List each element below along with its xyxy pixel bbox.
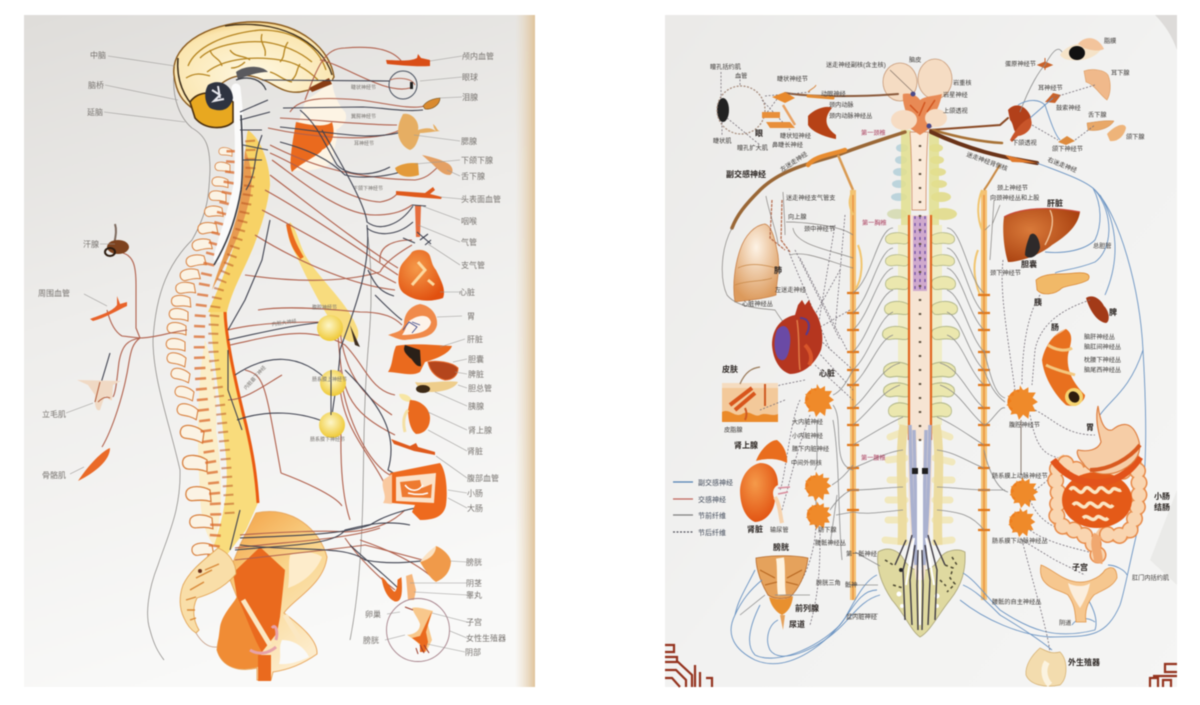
label: 颌下神经节: 颌下神经节 (1052, 145, 1083, 153)
organ: adrenal gland and kidney (399, 394, 430, 434)
label: 输尿管: 输尿管 (770, 526, 789, 534)
organ: lacrimal gland (423, 98, 440, 109)
label: 肛门内括约肌: 肛门内括约肌 (1132, 574, 1169, 582)
label: 迷走神经支气管支: 迷走神经支气管支 (786, 194, 836, 202)
organ: parotid gland right (1084, 70, 1110, 100)
organ: intestines (1053, 457, 1140, 563)
paper shading right (1150, 490, 1177, 585)
organ: heart frontal (772, 300, 822, 374)
label: 骨骼肌: 骨骼肌 (42, 470, 66, 480)
nerve fibers, parasympathetic (95, 80, 445, 590)
paper edge tint (515, 15, 535, 687)
label: 脾: 脾 (1109, 307, 1117, 317)
spinal cord (214, 88, 242, 265)
organ: sublingual and submandibular glands (1087, 121, 1126, 141)
label: 颈内动脉神经丛: 颈内动脉神经丛 (829, 112, 872, 120)
label: 阴道: 阴道 (1059, 619, 1071, 627)
label: 中脑: 中脑 (90, 50, 106, 60)
sympathetic chain right (974, 165, 1000, 600)
organ: spleen (1086, 296, 1109, 323)
label: 脾脏: 脾脏 (468, 369, 484, 379)
label: 眼球: 眼球 (462, 72, 478, 82)
label: 腹腔神经节: 腹腔神经节 (312, 304, 337, 311)
label: 脑尾西神经丛: 脑尾西神经丛 (1084, 366, 1121, 374)
label: 盆内脏神经: 盆内脏神经 (846, 613, 877, 621)
sacrum and coccyx (180, 548, 236, 647)
label: 睫状神经节: 睫状神经节 (351, 84, 376, 91)
label: 脑皮: 脑皮 (909, 56, 921, 64)
right head ganglia (1008, 49, 1095, 145)
label: 颈中神经节: 颈中神经节 (804, 225, 835, 233)
organ: skeletal muscle (78, 448, 110, 481)
organ: heart (398, 250, 444, 301)
label: 女性生殖器: 女性生殖器 (466, 633, 506, 643)
organ: intracranial blood vessel (386, 54, 430, 66)
label: 下颌透视: 下颌透视 (1012, 139, 1037, 147)
organ: pharynx, trachea and bronchi (403, 205, 431, 245)
organ: eyeball (389, 71, 417, 99)
label: 颈下神经节: 颈下神经节 (990, 269, 1021, 277)
panel: left poster, lateral autonomic nervous system (24, 15, 535, 687)
label: 颌下腺: 颌下腺 (1126, 133, 1145, 141)
label: 肠下腺: 肠下腺 (818, 526, 837, 534)
label: 大肠: 大肠 (467, 503, 483, 513)
yellow ganglia circles (317, 315, 360, 438)
label: 肾上腺: 肾上腺 (468, 425, 492, 435)
label: 小内脏神经: 小内脏神经 (792, 432, 823, 440)
right eye and head glands (1060, 38, 1104, 60)
sympathetic chain to ganglia (288, 222, 358, 342)
label: 左迷走神经 (lower): 左迷走神经 (775, 286, 806, 294)
vertebrae right poster (883, 130, 959, 545)
label: 子宫: 子宫 (1072, 562, 1088, 572)
label: 总胆管: 总胆管 (1093, 242, 1112, 250)
organ: scalp blood vessel (396, 187, 442, 199)
label: 颅内血管: 颅内血管 (462, 51, 494, 61)
label: 腹腔神经节: 腹腔神经节 (1009, 421, 1040, 429)
ganglia stars left (760, 370, 853, 625)
organ: bladder with prostate and urethra (756, 556, 808, 630)
organ: sweat gland (105, 224, 129, 256)
vertebral column yellow ganglion band (198, 130, 270, 556)
label: 尿道: 尿道 (789, 619, 805, 629)
label: 肾脏: 肾脏 (747, 524, 763, 534)
label: 睫状神经节: 睫状神经节 (777, 75, 808, 83)
organ: small and large intestine (383, 463, 447, 520)
decoration: bottom-left corner pattern (665, 645, 712, 687)
label: 支气管: 支气管 (461, 260, 485, 270)
pelvis (217, 511, 327, 681)
label: 腰骶的自主神经丛: 腰骶的自主神经丛 (992, 598, 1042, 606)
label: 心脏神经丛: 心脏神经丛 (742, 300, 773, 308)
label: 腰下内脏神经: 腰下内脏神经 (792, 445, 829, 453)
label: 岩重核: 岩重核 (953, 79, 972, 87)
paper shading top right (1155, 15, 1177, 50)
label: 周围血管: 周围血管 (38, 288, 70, 298)
label: 汗腺: 汗腺 (83, 239, 99, 249)
label: 舌下腺: 舌下腺 (461, 171, 485, 181)
label: 心脏: 心脏 (459, 287, 475, 297)
label: 肝脏: 肝脏 (1047, 198, 1063, 208)
organ: abdominal blood vessel (391, 439, 435, 455)
label: 迷走神经副核(含主核): 迷走神经副核(含主核) (826, 61, 886, 69)
label: 膀胱: 膀胱 (773, 542, 789, 552)
organ: pancreas (1036, 273, 1089, 294)
label: 舌下腺: 舌下腺 (1088, 111, 1107, 119)
brain (174, 22, 334, 128)
organ: penis and testis (382, 574, 416, 601)
label: 大内脏神经: 大内脏神经 (792, 418, 823, 426)
label: 泪腺: 泪腺 (462, 92, 478, 102)
organ: skin section (722, 367, 778, 422)
label: 立毛肌: 立毛肌 (42, 409, 66, 419)
label: 下颌下腺: 下颌下腺 (461, 155, 493, 165)
label: 颈内动脉: 颈内动脉 (829, 101, 855, 109)
label: 肠系膜下动脉神经丛: 肠系膜下动脉神经丛 (992, 537, 1048, 545)
spinal cord frontal (895, 132, 945, 630)
face (290, 78, 346, 172)
label: 结肠: 结肠 (1154, 502, 1170, 512)
organ: adrenal gland (756, 440, 787, 463)
label: 肠系膜上神经节: 肠系膜上神经节 (312, 376, 347, 383)
leader lines (66, 56, 467, 652)
label: 膀胱三角: 膀胱三角 (816, 579, 841, 587)
label: 肾脏: 肾脏 (467, 446, 483, 456)
label: 脑肝神经丛: 脑肝神经丛 (1084, 333, 1115, 341)
label: 下颌下神经节: 下颌下神经节 (353, 185, 383, 192)
nerve from vagus to heart (722, 215, 853, 400)
label: 皮肤: 皮肤 (722, 364, 738, 374)
label: 颈上神经节: 颈上神经节 (997, 184, 1028, 192)
label: 胆总管: 胆总管 (468, 383, 492, 393)
label: 腮腺: 腮腺 (461, 136, 477, 146)
label: 胆囊: 胆囊 (468, 354, 484, 364)
organ: liver, gallbladder, spleen and bile duct (388, 344, 458, 393)
label: 瞳孔括约肌: 瞳孔括约肌 (710, 63, 741, 71)
label: 睫状短神经: 睫状短神经 (780, 132, 811, 140)
label: 鼻睫长神经: 鼻睫长神经 (772, 141, 803, 149)
label: 枕腰下神经丛: 枕腰下神经丛 (1084, 356, 1121, 364)
sympathetic chain left (838, 155, 862, 600)
label: 脂膜: 脂膜 (1104, 37, 1116, 45)
label: 内脏大神经: 内脏大神经 (271, 318, 297, 328)
vagus branches right (960, 163, 1146, 650)
nerve fibers, sympathetic (102, 47, 438, 590)
legend: postganglionic: 节后纤维 (698, 528, 726, 537)
label: 胆囊: 胆囊 (1021, 259, 1037, 269)
label: 肠系膜上动脉神经节: 肠系膜上动脉神经节 (992, 472, 1048, 480)
label: 血管: 血管 (735, 72, 747, 80)
label: 右迷走神经: 右迷走神经 (1046, 155, 1078, 174)
organ: large intestine segment (1042, 329, 1087, 410)
vertebrae spinous processes (166, 140, 251, 560)
organ: submandibular and sublingual glands (395, 155, 453, 177)
label: 耳神经节: 耳神经节 (1038, 84, 1063, 92)
label: 肾上腺: 肾上腺 (734, 440, 758, 450)
label: 动眼神经: 动眼神经 (821, 90, 846, 98)
brain stem and cerebellum (883, 59, 952, 135)
ganglia stars right (984, 350, 1100, 655)
label: 岩星神经: 岩星神经 (943, 91, 968, 99)
sacrum (878, 549, 965, 637)
label: 心脏: 心脏 (819, 368, 835, 378)
label: 鼓索神经: 鼓索神经 (1056, 104, 1081, 112)
label: 迷走神经背侧核: 迷走神经背侧核 (965, 150, 1009, 173)
label: 外生殖器: 外生殖器 (1068, 657, 1100, 667)
label: 腹部血管: 腹部血管 (467, 473, 499, 483)
label: 第一腰椎: 第一腰椎 (861, 454, 886, 462)
panel: right poster, frontal autonomic nervous system (665, 15, 1177, 687)
label: 内脏最下神经: 内脏最下神经 (242, 364, 268, 391)
label: 左迷走神经: 左迷走神经 (779, 150, 809, 174)
label: 第一骶神经: 第一骶神经 (846, 550, 877, 558)
body outline (148, 75, 371, 660)
aorta orange line (225, 312, 258, 503)
label: 子宫: 子宫 (466, 617, 482, 627)
sacral pelvic splanchnic nerves left (731, 552, 880, 664)
legend (673, 478, 733, 537)
organ: external genitalia (1026, 648, 1066, 686)
organ: peripheral blood vessel (90, 296, 127, 321)
label: 阴部: 阴部 (465, 647, 481, 657)
label: 眼: 眼 (755, 129, 763, 138)
label: 蛋原神经节: 蛋原神经节 (1005, 60, 1036, 68)
label: 小肠: 小肠 (1154, 491, 1170, 501)
label: 前列腺: 前列腺 (795, 603, 819, 613)
label: 中间外侧核: 中间外侧核 (791, 459, 822, 467)
label: 向颈神经丛和上股: 向颈神经丛和上股 (990, 194, 1040, 202)
label: 肠: 肠 (1051, 323, 1059, 332)
label: 向上腺: 向上腺 (788, 213, 807, 221)
label: 胰: 胰 (1034, 297, 1042, 307)
nerve roots near cervical spine (240, 100, 270, 160)
label: 小肠: 小肠 (467, 489, 483, 498)
organ: parotid gland (398, 114, 440, 150)
label: 上颌透视: 上颌透视 (943, 107, 968, 115)
label: 阴茎: 阴茎 (466, 578, 482, 588)
preganglionic fibers from spine to chains (853, 228, 984, 530)
decoration: bottom-right corner pattern (1150, 664, 1177, 687)
label: 第一胸椎: 第一胸椎 (862, 219, 887, 227)
label: 脑桥: 脑桥 (88, 80, 104, 90)
organ: skin with arrector pili muscle (77, 380, 121, 410)
label: 睾丸: 睾丸 (466, 590, 482, 600)
label: 第一颈椎: 第一颈椎 (861, 129, 886, 137)
label: 耳神经节: 耳神经节 (354, 140, 374, 147)
legend: preganglionic: 节前纤维 (698, 511, 726, 520)
label: 肠系膜下神经节: 肠系膜下神经节 (310, 436, 345, 443)
legend: parasympathetic: 副交感神经 (698, 478, 733, 487)
label: 副交感神经: 副交感神经 (726, 169, 766, 179)
label: 睫状肌: 睫状肌 (713, 137, 732, 145)
thick parasympathetic nerve trunks (732, 93, 1037, 228)
organ: stomach (388, 304, 437, 340)
label: 延脑: 延脑 (87, 107, 103, 117)
organ: kidney (740, 463, 790, 523)
panel background (24, 15, 535, 687)
label: 胰腺: 胰腺 (468, 401, 484, 411)
label: 脑肛间神经丛: 脑肛间神经丛 (1084, 343, 1121, 351)
label: 翼腭神经节: 翼腭神经节 (351, 113, 376, 120)
label: 卵巢: 卵巢 (365, 609, 381, 619)
label: 膀胱 (female): 膀胱 (363, 635, 379, 645)
label: 皮脂腺: 皮脂腺 (724, 426, 743, 434)
label: 肝脏: 肝脏 (467, 334, 483, 344)
label: 骶神: 骶神 (845, 581, 857, 589)
eye left with ciliary system (717, 72, 836, 145)
organ: lung (734, 192, 790, 302)
organ: uterus (1040, 565, 1117, 622)
organ: stomach right (1077, 406, 1140, 474)
label: 瞳孔扩大肌: 瞳孔扩大肌 (737, 144, 768, 152)
label: 腰骶神经丛: 腰骶神经丛 (815, 539, 846, 547)
organ: liver and gallbladder (1003, 209, 1080, 262)
label: 耳下腺: 耳下腺 (1111, 69, 1130, 77)
label: 气管: 气管 (461, 237, 477, 247)
label: 咽喉: 咽喉 (461, 216, 477, 226)
inset: female reproductive organs (386, 598, 450, 662)
legend: sympathetic: 交感神经 (698, 495, 726, 504)
label: 肺: 肺 (774, 265, 782, 275)
label: 胃: 胃 (467, 312, 475, 321)
organ: bladder (420, 546, 451, 582)
label: 膀胱: 膀胱 (466, 557, 482, 567)
label: 胃: 胃 (1086, 423, 1094, 432)
panel background (665, 15, 1177, 687)
label: 头表面血管: 头表面血管 (461, 194, 501, 204)
